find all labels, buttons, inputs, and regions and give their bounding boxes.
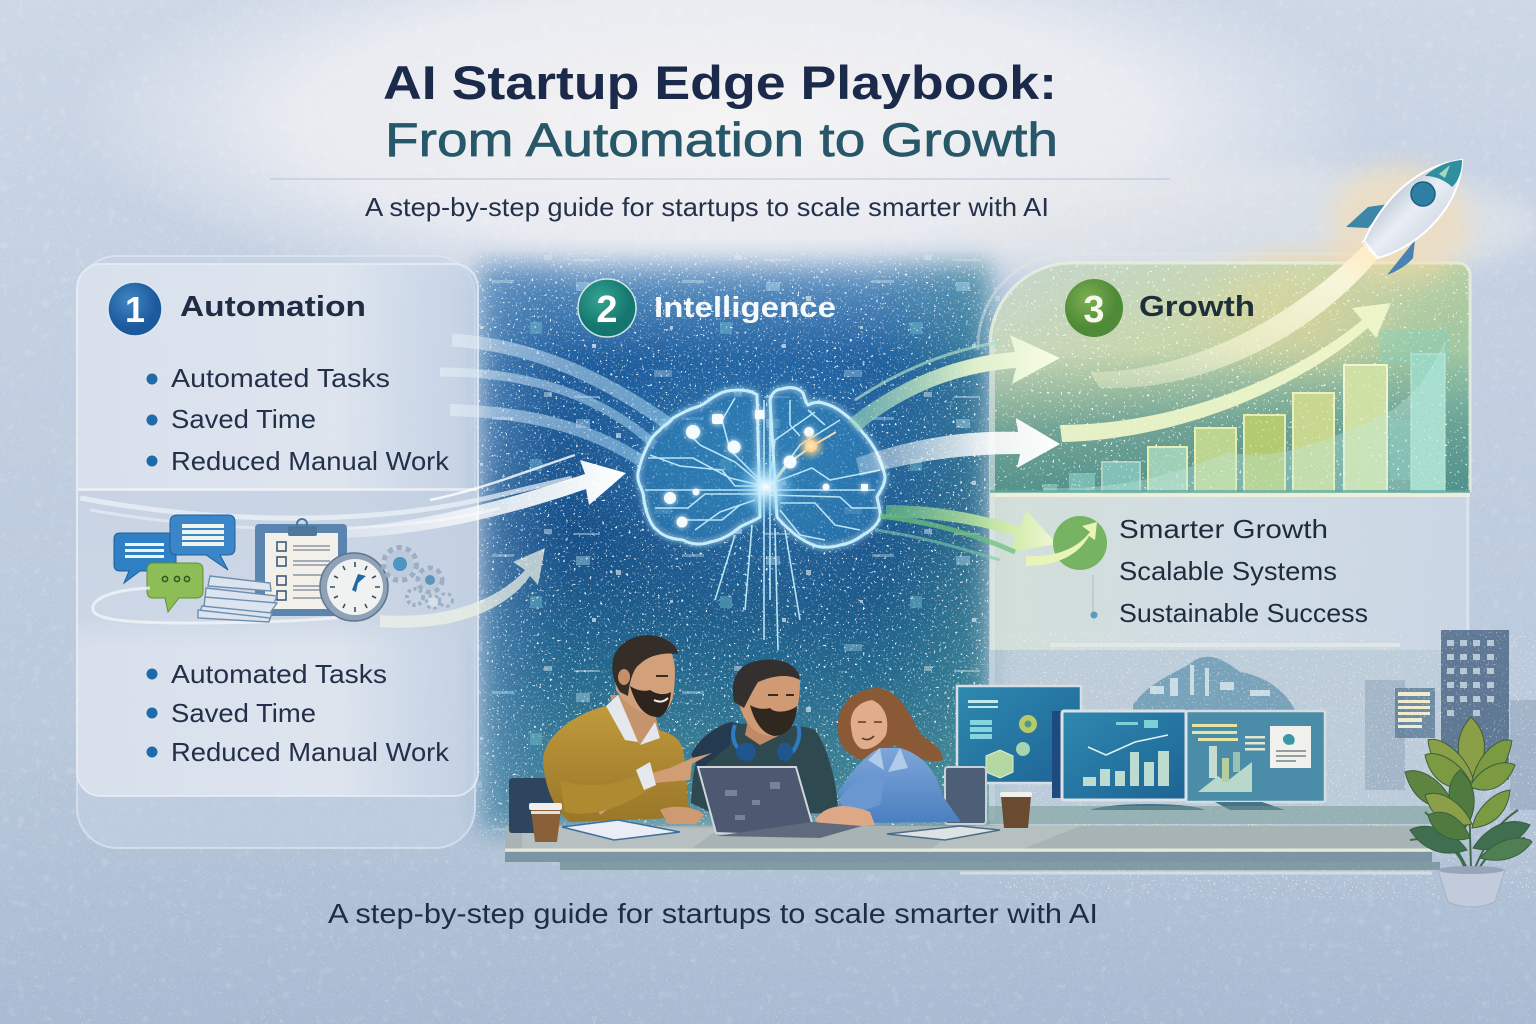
- arrow: rocket trail: [1090, 245, 1378, 388]
- brain nodes: [664, 410, 868, 528]
- heading: growth: [1065, 279, 1255, 337]
- list: growth outcomes: Scalable Systems: [1119, 556, 1337, 586]
- list: automation benefits bottom: Saved Time: [171, 698, 316, 728]
- person: man in sweater: [543, 635, 712, 824]
- title: [383, 56, 1058, 166]
- heading: intelligence: 2: [596, 289, 618, 331]
- caption: bottom guide line: A step-by-step guide for startups to scale smarter with AI: [328, 898, 1098, 929]
- title: AI Startup Edge Playbook:: [383, 56, 1057, 109]
- monitor stand: [1090, 802, 1285, 810]
- panel: intelligence backdrop: [450, 240, 1020, 850]
- divider: [270, 178, 1170, 180]
- arrow: small automation arrow: [380, 548, 545, 628]
- desk: [505, 806, 1440, 873]
- heading: intelligence: [578, 279, 836, 337]
- person: man in hoodie: [691, 660, 838, 815]
- title: From Automation to Growth: [385, 113, 1058, 166]
- list: automation benefits bottom: Automated Tasks: [171, 659, 387, 689]
- icon: brain circuit: [638, 388, 885, 650]
- subtitle: A step-by-step guide for startups to scale smarter with AI: [365, 192, 1049, 222]
- icon: potted plant: [1405, 717, 1532, 907]
- list: automation benefits top: Reduced Manual Work: [171, 446, 450, 476]
- list: growth outcomes: [1119, 514, 1368, 628]
- panel: automation: [77, 256, 478, 848]
- list: automation benefits top: Automated Tasks: [171, 363, 390, 393]
- panel: growth text area: [989, 340, 1470, 820]
- list: automation benefits bottom: [146, 659, 450, 767]
- icon: rocket: [1330, 160, 1470, 285]
- icon: clipboard checklist: [255, 519, 347, 616]
- chair right: [945, 767, 986, 824]
- icon: chat bubbles: [114, 515, 235, 612]
- icon: gears: [384, 548, 452, 608]
- flow arrows into brain: [80, 340, 670, 628]
- list: automation benefits top: [146, 363, 450, 476]
- arrow: chart trend: [1060, 303, 1391, 442]
- list: automation benefits bottom: Reduced Manual Work: [171, 737, 450, 767]
- heading: intelligence: Intelligence: [654, 292, 836, 324]
- icon: clock: [320, 553, 388, 621]
- heading: growth: Growth: [1139, 291, 1255, 323]
- icon: coffee cup left: [529, 803, 562, 842]
- city skyline: [990, 630, 1536, 900]
- icon: growth badge arrow: [1026, 516, 1107, 618]
- monitor: bar chart center: [1052, 711, 1186, 800]
- heading: growth: 3: [1083, 289, 1105, 331]
- person: woman: [815, 688, 961, 830]
- flow arrows out to growth: [848, 335, 1060, 560]
- list: growth outcomes: Smarter Growth: [1119, 514, 1328, 544]
- icon: swoosh ring: [93, 588, 370, 623]
- heading: automation: 1: [125, 289, 145, 330]
- laptop: [698, 767, 862, 838]
- paper: notes left: [562, 820, 680, 840]
- list: automation benefits top: Saved Time: [171, 404, 316, 434]
- icon: paper stack: [198, 576, 277, 622]
- icon: headphones: [733, 725, 799, 755]
- paper: notes right: [887, 826, 1000, 840]
- chair left: [509, 778, 554, 833]
- monitor: back left dashboard: [957, 686, 1081, 783]
- icon: coffee cup right: [1000, 792, 1032, 828]
- growth bar chart: [990, 340, 1470, 493]
- list: growth outcomes: Sustainable Success: [1119, 598, 1368, 628]
- monitor: chart screen right: [1186, 711, 1325, 802]
- panel: growth chart area: [978, 235, 1470, 493]
- heading: automation: [108, 282, 366, 336]
- heading: automation: Automation: [180, 291, 366, 323]
